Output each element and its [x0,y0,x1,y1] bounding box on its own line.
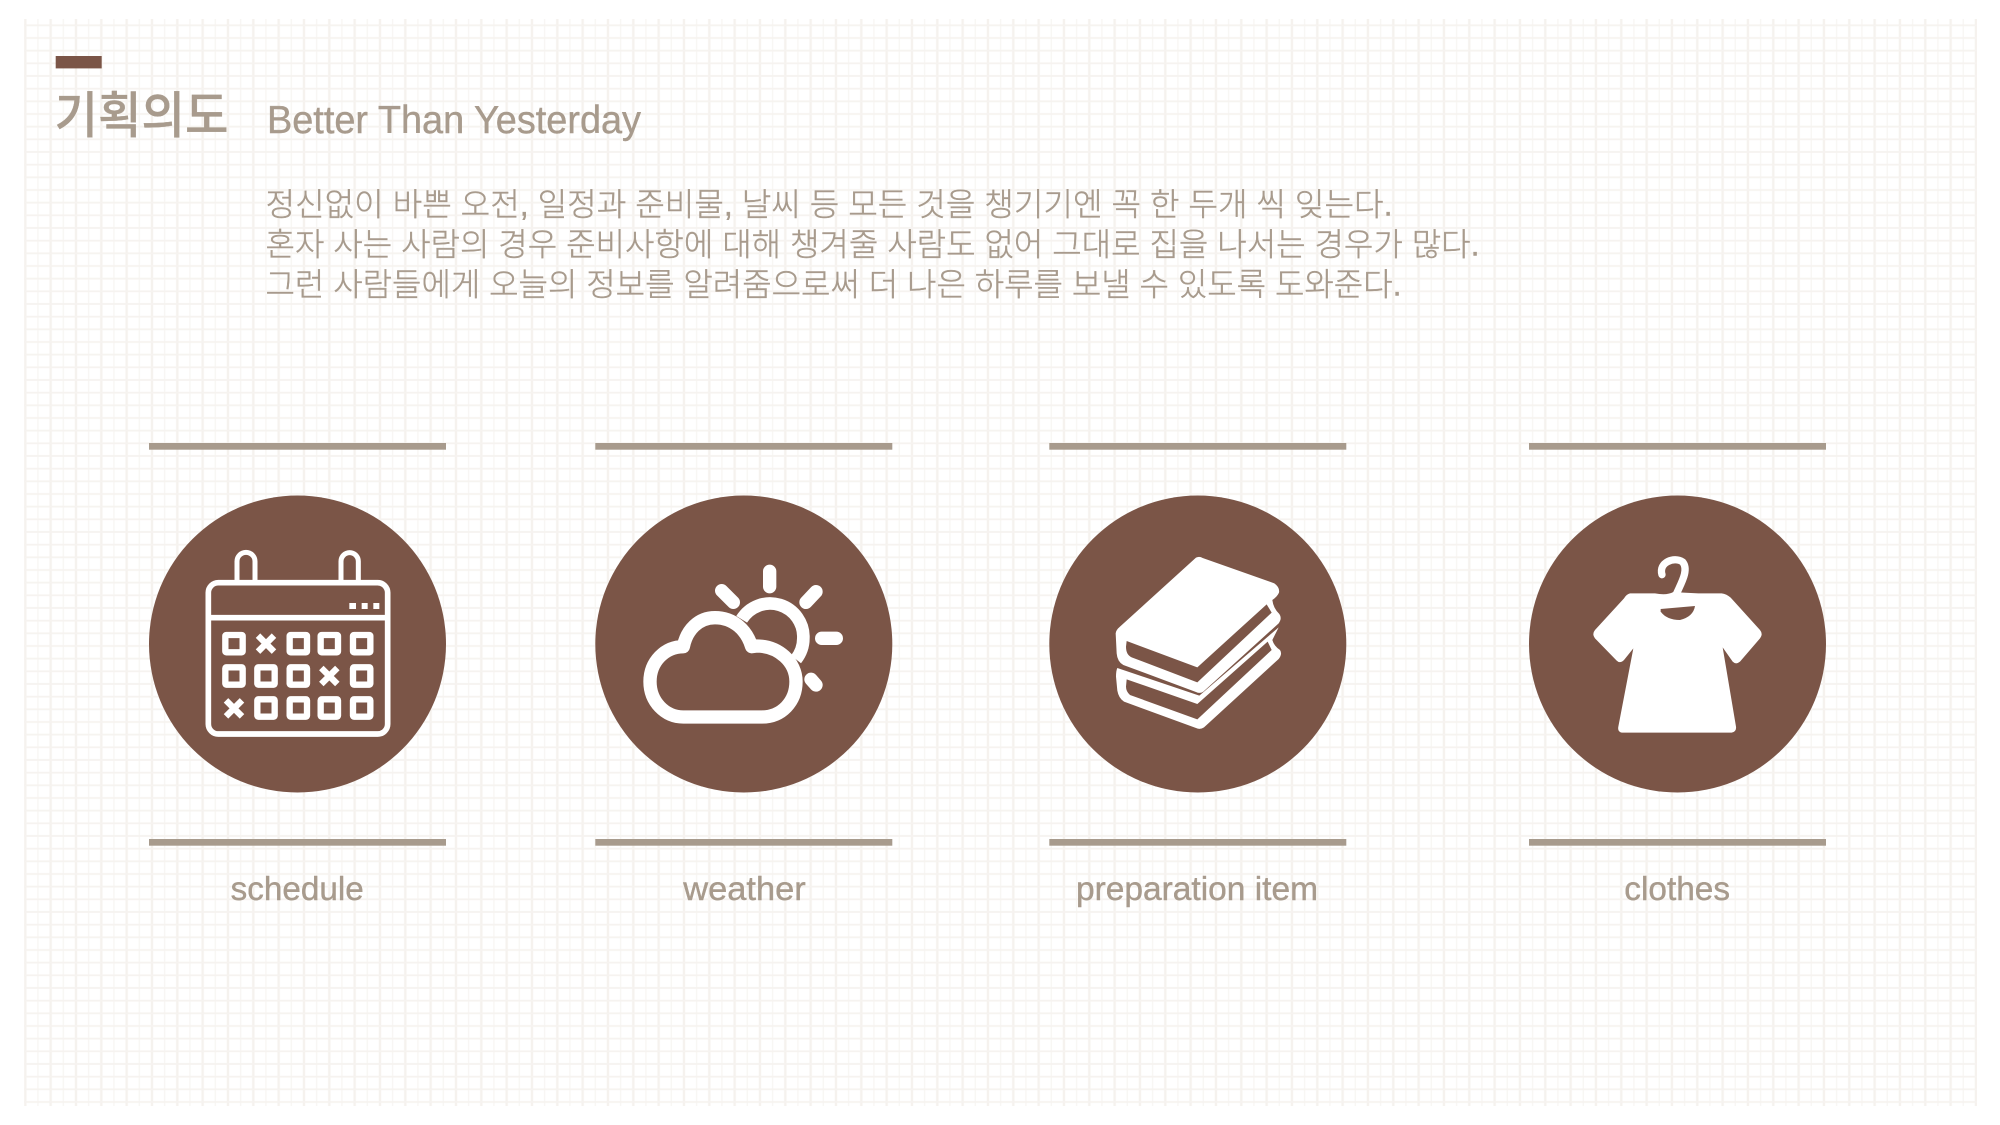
panel: schedule [149,443,446,907]
title accent bar [56,56,102,68]
label: weather: weather [682,870,806,907]
icon: calendar [208,552,388,734]
bottom rule [149,839,446,846]
bottom rule [1049,839,1346,846]
intro paragraph: 혼자 사는 사람의 경우 준비사항에 대해 챙겨줄 사람도 없어 그대로 집을 나서는 경우가 많다. [266,226,1480,262]
top rule [1049,443,1346,450]
panel: preparation item [1049,443,1346,907]
top rule [595,443,892,450]
icon: sun behind cloud [650,571,836,717]
icon: shirt on hanger [1593,560,1762,733]
circle background [1529,496,1826,792]
intro paragraph [266,186,1480,302]
panel: clothes [1529,443,1826,907]
circle background [149,496,446,792]
subheading: Better Than Yesterday: Better Than Yesterday [267,99,642,142]
top rule [149,443,446,450]
intro paragraph: 정신없이 바쁜 오전, 일정과 준비물, 날씨 등 모든 것을 챙기기엔 꼭 한 두개 씩 잊는다. [266,186,1392,222]
panel: weather [595,443,892,907]
bottom rule [1529,839,1826,846]
heading: 기획의도: 기획의도 [54,88,228,144]
label: clothes: clothes [1624,870,1730,907]
circle background [595,496,892,792]
label: preparation item: preparation item [1076,870,1318,907]
icon: stacked books [1116,557,1281,729]
top rule [1529,443,1826,450]
label: schedule: schedule [231,870,364,907]
circle background [1049,496,1346,792]
intro paragraph: 그런 사람들에게 오늘의 정보를 알려줌으로써 더 나은 하루를 보낼 수 있도록 도와준다. [266,266,1402,302]
bottom rule [595,839,892,846]
